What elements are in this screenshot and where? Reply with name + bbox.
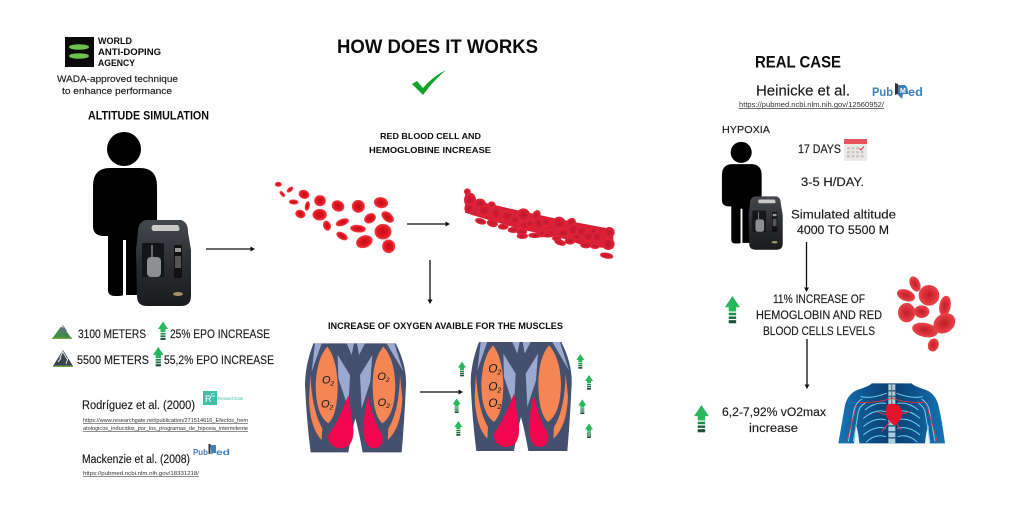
illustration: muscles before: O: [378, 397, 386, 409]
logo: PubMed small: ed: [216, 447, 230, 457]
icon: green check mark: [412, 70, 446, 95]
logo: World Anti-Doping Agency: ANTI-DOPING: [98, 47, 161, 58]
arrow: more cells: [407, 222, 450, 226]
citation: Rodríguez et al.: Rodríguez et al. (2000): [82, 400, 195, 412]
heading: altitude simulation: ALTITUDE SIMULATION: [88, 110, 209, 122]
logo: PubMed: Pub: [872, 87, 893, 99]
text: vo2max increase: increase: [749, 423, 798, 435]
text: hours per day: 3-5 H/DAY.: [801, 177, 864, 189]
text: 55,2% EPO increase: 55,2% EPO INCREASE: [164, 355, 274, 367]
illustration: muscles after: O: [488, 362, 497, 375]
illustration: muscles after: O: [488, 380, 497, 393]
illustration: muscles after: 2: [496, 369, 501, 376]
text: 3100 meters: 3100 METERS: [78, 329, 146, 341]
illustration: muscles after: [471, 342, 572, 451]
citation: Heinicke et al.: Heinicke et al.: [756, 84, 850, 100]
link: ResearchGate url: [83, 418, 248, 432]
text: hemoglobin increase: BLOOD CELLS LEVELS: [763, 326, 875, 338]
logo: PubMed small: Pub: [193, 447, 208, 457]
logo: ResearchGate: ResearchGate: [218, 396, 243, 401]
text: WADA-approved technique: to enhance performance: [62, 86, 172, 97]
illustration: muscles after: 2: [496, 387, 501, 394]
text: hemoglobin increase: 11% INCREASE OF: [773, 294, 865, 306]
link: ResearchGate url: https://www.researchgate.net/publication/271514616_Efectos_hem: [83, 418, 248, 424]
logo: World Anti-Doping Agency: AGENCY: [98, 58, 136, 69]
illustration: muscles after: O: [488, 397, 497, 410]
link: Heinicke url: https://pubmed.ncbi.nlm.nih.gov/12560952/: [739, 102, 884, 109]
icon: green mountain: [52, 325, 72, 339]
heading: red blood cell and hemoglobine increase: HEMOGLOBINE INCREASE: [369, 145, 491, 155]
icon: calendar: [844, 139, 867, 161]
illustration: muscles before: 2: [385, 377, 390, 384]
text: vo2max increase: [722, 407, 826, 435]
citation: Mackenzie et al.: Mackenzie et al. (2008): [82, 454, 190, 466]
arrow: machine to red cells: [206, 246, 255, 252]
illustration: muscles before: 2: [330, 380, 335, 387]
logo: World Anti-Doping Agency: WORLD: [98, 36, 132, 47]
logo: PubMed: ed: [908, 87, 923, 99]
illustration: muscles before: 2: [385, 403, 390, 410]
heading: red blood cell and hemoglobine increase: [369, 131, 491, 155]
icons: green arrows around muscles: [453, 354, 593, 438]
logo: World Anti-Doping Agency: [65, 36, 161, 69]
text: simulated altitude: [791, 210, 896, 237]
illustration: sparse red blood cells: [275, 182, 395, 253]
text: vo2max increase: 6,2-7,92% vO2max: [722, 407, 826, 419]
text: WADA-approved technique: WADA-approved technique: [57, 74, 178, 85]
text: 17 days: 17 DAYS: [798, 144, 841, 156]
icon: green up arrow: [158, 322, 168, 340]
icon: green up arrow: [725, 296, 740, 323]
link: ResearchGate url: atologicos_inducidos_por_los_programas_de_hipoxia_intermitente: [83, 426, 248, 432]
logo: ResearchGate: G: [211, 393, 215, 399]
text: 25% EPO increase: 25% EPO INCREASE: [170, 329, 270, 341]
icon: green up arrow: [153, 347, 164, 366]
illustration: muscles before: [305, 343, 406, 452]
text: hemoglobin increase: HEMOGLOBIN AND RED: [756, 310, 882, 322]
icon: dark mountain: [53, 350, 73, 367]
illustration: red blood cells: [896, 275, 959, 353]
arrow: hemoglobin to vo2max: [804, 339, 810, 389]
illustration: chest with heart: [838, 383, 945, 443]
illustration: muscles before: 2: [329, 405, 334, 412]
illustration: muscles after: 2: [496, 404, 501, 411]
arrow: cells down to oxygen: [428, 260, 432, 304]
illustration: muscles before: O: [322, 374, 331, 386]
illustration: muscles before: O: [321, 399, 330, 411]
heading: increase of oxygen: INCREASE OF OXYGEN AVAIBLE FOR THE MUSCLES: [328, 321, 563, 332]
text: simulated altitude: Simulated altitude: [791, 210, 896, 222]
icon: small person with machine: [722, 142, 783, 250]
text: hemoglobin increase: [756, 294, 882, 338]
text: WADA-approved technique: [57, 74, 178, 97]
illustration: dense red blood cells: [465, 189, 614, 259]
arrow: hypoxia to hemoglobin: [804, 242, 809, 292]
icon: green up arrow: [694, 405, 709, 432]
text: simulated altitude: 4000 TO 5500 M: [797, 225, 889, 237]
heading: red blood cell and hemoglobine increase: RED BLOOD CELL AND: [380, 131, 481, 141]
text: 5500 meters: 5500 METERS: [77, 355, 149, 367]
logo: PubMed small: [193, 444, 230, 457]
icon: person with altitude machine: [93, 132, 191, 306]
illustration: muscles before: O: [377, 371, 386, 383]
logo: ResearchGate: [203, 391, 243, 405]
text: hypoxia: HYPOXIA: [722, 124, 770, 136]
link: PubMed url: https://pubmed.ncbi.nlm.nih.gov/18331218/: [83, 471, 200, 477]
title: HOW DOES IT WORKS: [337, 37, 538, 58]
logo: PubMed: [872, 83, 923, 99]
logo: PubMed: M: [900, 88, 906, 95]
arrow: muscles before to after: [420, 390, 463, 394]
logo: ResearchGate: R: [205, 394, 212, 404]
heading: real case: REAL CASE: [755, 54, 841, 72]
